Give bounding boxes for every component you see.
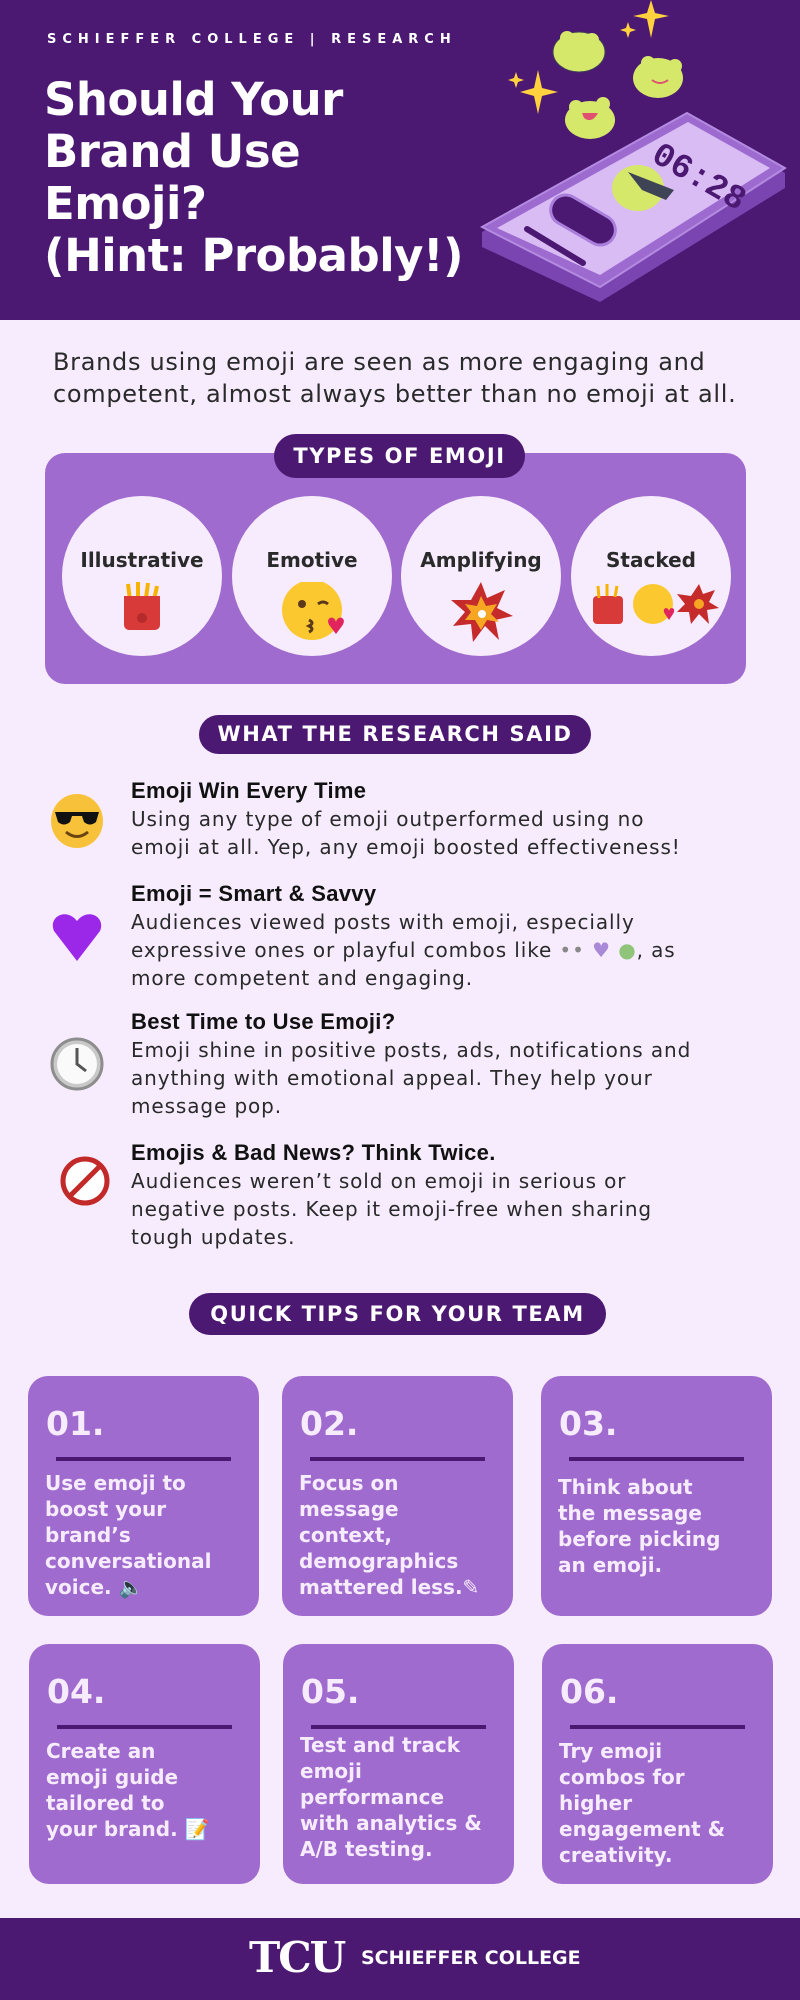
card 01: conversational xyxy=(45,1549,211,1573)
intro text xyxy=(53,348,736,408)
circle: stacked: Stacked xyxy=(606,548,696,572)
circle: stacked xyxy=(571,496,731,656)
icon: clock xyxy=(50,1038,104,1090)
item: emojis and bad news: negative posts. Keep it emoji-free when sharing xyxy=(131,1197,652,1221)
icon: purple heart xyxy=(52,914,102,961)
title: Should Your xyxy=(44,73,343,126)
title: Emoji? xyxy=(44,177,206,230)
item: emoji smart and savvy: Audiences viewed posts with emoji, especially xyxy=(131,910,635,934)
card 06: Try emoji xyxy=(559,1739,662,1763)
item: emoji smart and savvy: expressive ones or playful combos like •• ♥ ●, as xyxy=(131,938,676,962)
card 02: mattered less.✎ xyxy=(299,1575,479,1599)
card 06: engagement & xyxy=(559,1817,725,1841)
item: best time to use emoji: Emoji shine in positive posts, ads, notifications and xyxy=(131,1038,691,1062)
illustration: phone with frogs: 06:28 xyxy=(644,137,752,221)
card 06: creativity. xyxy=(559,1843,672,1867)
footer text: SCHIEFFER COLLEGE xyxy=(361,1947,581,1969)
item: emojis and bad news xyxy=(60,1140,652,1249)
item: emoji win every time: Emoji Win Every Time xyxy=(131,778,366,803)
intro text: Brands using emoji are seen as more engaging and xyxy=(53,348,705,376)
heading: types of emoji: TYPES OF EMOJI xyxy=(293,444,506,468)
heading: what the research said xyxy=(199,715,591,754)
circle: amplifying: Amplifying xyxy=(420,548,542,572)
icon: prohibited xyxy=(60,1156,110,1206)
title: (Hint: Probably!) xyxy=(44,229,463,282)
eyebrow label: SCHIEFFER COLLEGE | RESEARCH xyxy=(47,32,457,47)
item: best time to use emoji: Best Time to Use Emoji? xyxy=(131,1009,395,1034)
item: emojis and bad news: Emojis & Bad News? Think Twice. xyxy=(131,1140,496,1165)
card 05: A/B testing. xyxy=(300,1837,433,1861)
item: emoji smart and savvy xyxy=(52,881,676,990)
circle: illustrative xyxy=(62,496,222,656)
circle: emotive xyxy=(232,496,392,656)
item: emoji win every time: emoji at all. Yep, any emoji boosted effectiveness! xyxy=(131,835,681,859)
card 05 xyxy=(283,1644,514,1884)
card 01: 01. xyxy=(46,1404,104,1443)
intro text: competent, almost always better than no emoji at all. xyxy=(53,380,736,408)
card 02: 02. xyxy=(300,1404,358,1443)
card 04: Create an xyxy=(46,1739,155,1763)
card 05: performance xyxy=(300,1785,444,1809)
circle: illustrative: Illustrative xyxy=(80,548,204,572)
card 04 xyxy=(29,1644,260,1884)
heading: what the research said: WHAT THE RESEARCH SAID xyxy=(217,722,573,746)
card 01: Use emoji to xyxy=(45,1471,186,1495)
heading: quick tips: QUICK TIPS FOR YOUR TEAM xyxy=(210,1302,585,1326)
card 02: message xyxy=(299,1497,399,1521)
panel: types of emoji xyxy=(45,453,746,684)
circle: emotive: Emotive xyxy=(266,548,358,572)
card 06: 06. xyxy=(560,1672,618,1711)
card 03: before picking xyxy=(558,1527,720,1551)
heading: quick tips xyxy=(189,1293,606,1335)
item: emoji win every time xyxy=(51,778,681,859)
card 02: context, xyxy=(299,1523,392,1547)
card 03: 03. xyxy=(559,1404,617,1443)
card 05: Test and track xyxy=(300,1733,460,1757)
card 01: voice. 🔈 xyxy=(45,1575,144,1599)
item: best time to use emoji xyxy=(50,1009,691,1118)
card 06: higher xyxy=(559,1791,632,1815)
card 01 xyxy=(28,1376,259,1616)
card 03: the message xyxy=(558,1501,702,1525)
circle: amplifying xyxy=(401,496,561,656)
card 02: Focus on xyxy=(299,1471,399,1495)
card 04: tailored to xyxy=(46,1791,165,1815)
card 06 xyxy=(542,1644,773,1884)
logo: TCU: TCU xyxy=(249,1933,344,1982)
heading: types of emoji xyxy=(274,434,525,478)
item: emoji smart and savvy: more competent and engaging. xyxy=(131,966,473,990)
item: best time to use emoji: anything with emotional appeal. They help your xyxy=(131,1066,653,1090)
title: Brand Use xyxy=(44,125,300,178)
card 04: 04. xyxy=(47,1672,105,1711)
footer xyxy=(0,1918,800,2000)
title xyxy=(44,73,463,282)
card 05: emoji xyxy=(300,1759,362,1783)
card 01: boost your xyxy=(45,1497,166,1521)
card 05: 05. xyxy=(301,1672,359,1711)
icon: sunglasses face xyxy=(51,794,103,848)
header xyxy=(0,0,800,320)
illustration: phone with frogs xyxy=(480,0,787,302)
card 04: emoji guide xyxy=(46,1765,178,1789)
card 02: demographics xyxy=(299,1549,458,1573)
card 03: an emoji. xyxy=(558,1553,662,1577)
item: emojis and bad news: tough updates. xyxy=(131,1225,295,1249)
item: best time to use emoji: message pop. xyxy=(131,1094,282,1118)
card 03: Think about xyxy=(558,1475,693,1499)
item: emoji smart and savvy: Emoji = Smart & Savvy xyxy=(131,881,376,906)
card 01: brand’s xyxy=(45,1523,131,1547)
card 04: your brand. 📝 xyxy=(46,1817,210,1841)
item: emojis and bad news: Audiences weren’t sold on emoji in serious or xyxy=(131,1169,626,1193)
card 06: combos for xyxy=(559,1765,685,1789)
card 05: with analytics & xyxy=(300,1811,482,1835)
item: emoji win every time: Using any type of emoji outperformed using no xyxy=(131,807,644,831)
card 03 xyxy=(541,1376,772,1616)
card 02 xyxy=(282,1376,513,1616)
